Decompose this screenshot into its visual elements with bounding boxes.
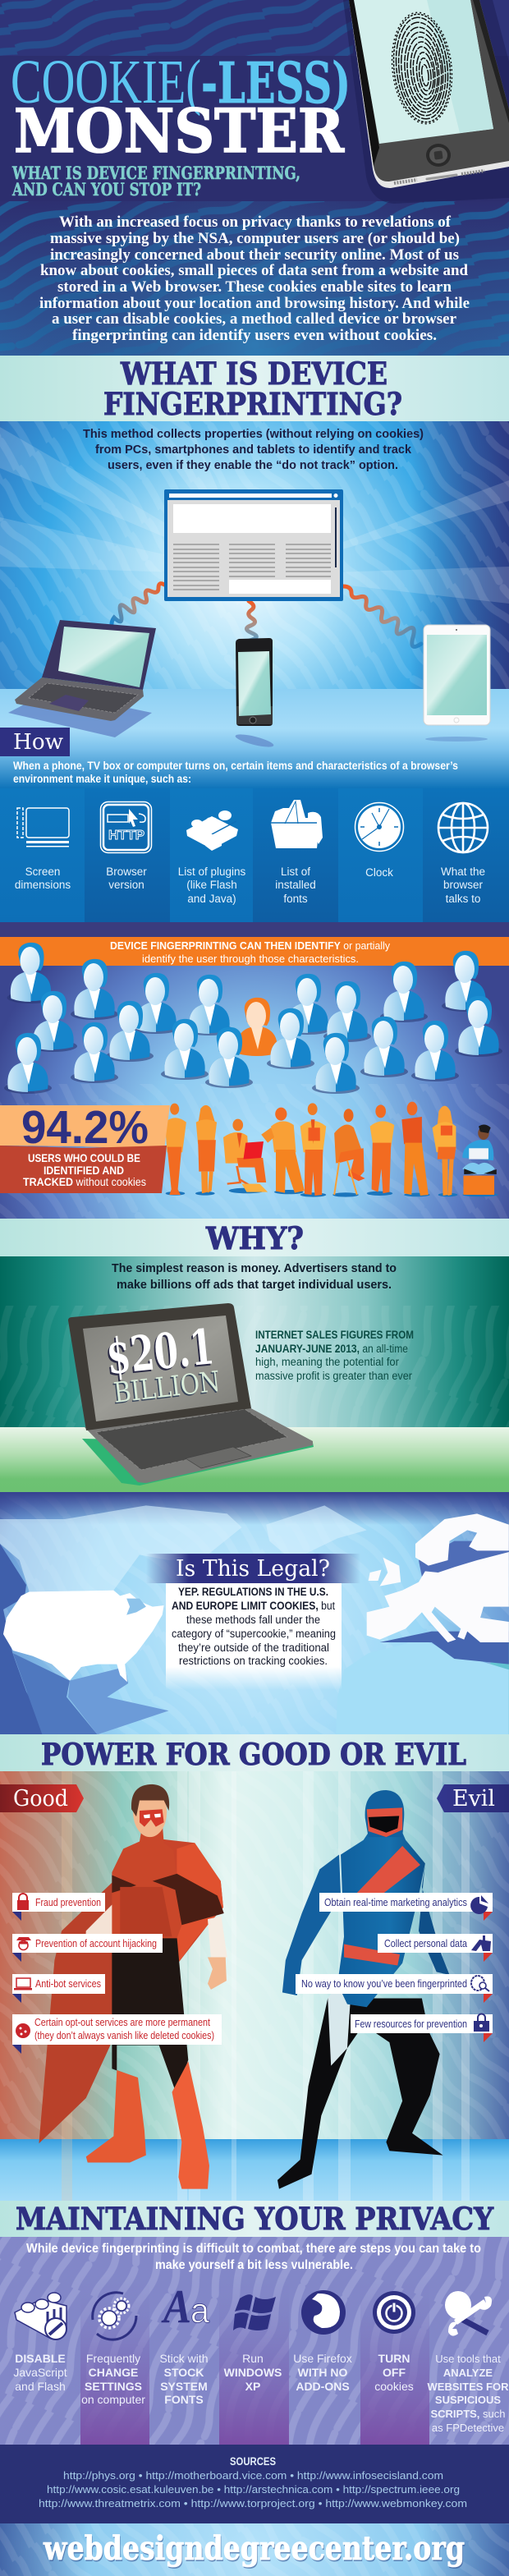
- text block: identify statement: [110, 939, 390, 965]
- callout: 94.2% statistic: TRACKED without cookies: [23, 1176, 146, 1188]
- subtitle: AND CAN YOU STOP IT?: [11, 179, 201, 200]
- text: privacy step labels: on computer: [81, 2393, 145, 2406]
- text: how item labels: List of: [281, 866, 310, 878]
- panel: sources: SOURCES: [230, 2455, 276, 2468]
- text block: method description: This method collects properties (without relying on cookies): [83, 428, 424, 441]
- callout: collect personal data: [378, 1934, 493, 1962]
- callout: prevention of account hijacking: Prevention of account hijacking: [35, 1937, 157, 1949]
- callout: opt-out services: [12, 2014, 222, 2054]
- chart: crowd of user busts with one identified in orange: [4, 943, 502, 1094]
- icon: screen dimensions: [17, 808, 69, 847]
- icon: browser version: [100, 801, 151, 852]
- text: privacy step labels: WITH NO: [298, 2366, 347, 2379]
- text block: internet sales figures: [255, 1329, 414, 1382]
- text: legal explanation: these methods fall under the: [186, 1614, 320, 1626]
- icon: globe: [438, 803, 488, 852]
- callout: no way to know: No way to know you’ve been fingerprinted: [301, 1977, 467, 1990]
- panel: what is device fingerprinting heading band: FINGERPRINTING?: [103, 386, 402, 422]
- icon: windows logo: [233, 2294, 276, 2330]
- text: legal explanation: they’re outside of the traditional: [178, 1642, 329, 1654]
- icon: laptop showing sales figure: $20.1: [104, 1318, 217, 1385]
- text: privacy step labels: OFF: [383, 2366, 406, 2379]
- callout: prevention of account hijacking: [12, 1934, 163, 1962]
- text: legal explanation: [172, 1586, 336, 1667]
- text: privacy step labels: Use tools that: [435, 2353, 501, 2365]
- text block: identify statement: DEVICE FINGERPRINTING CAN THEN IDENTIFY or partially: [110, 939, 390, 952]
- text: privacy step labels: cookies: [374, 2380, 414, 2393]
- text block: introduction: stored in a Web browser. These cookies enable sites to learn: [57, 278, 452, 296]
- icon: clock: [355, 803, 404, 851]
- text: privacy step labels: STOCK: [164, 2366, 204, 2379]
- tag: good: [0, 1784, 84, 1812]
- person 10 blue seated with laptop: [462, 1125, 497, 1195]
- chart: world map with U.S. and Europe highlighted: [0, 1505, 509, 1734]
- text: legal explanation: YEP. REGULATIONS IN THE U.S.: [178, 1586, 328, 1598]
- icon: smartphone: [235, 638, 274, 750]
- text: privacy step labels: ANALYZE: [443, 2367, 493, 2379]
- panel: what is device fingerprinting heading band: WHAT IS DEVICE: [120, 356, 387, 392]
- tag: evil: [437, 1784, 509, 1812]
- text: how item labels: Clock: [365, 866, 393, 879]
- Britain: [380, 1558, 401, 1586]
- text: privacy step labels: Run: [242, 2352, 264, 2365]
- icon: laptop: [8, 620, 156, 737]
- panel: why heading band: [0, 1219, 509, 1256]
- text block: identify statement: identify the user through those characteristics.: [142, 953, 359, 965]
- text: privacy step labels: XP: [245, 2380, 260, 2393]
- icon: rotating gears: [93, 2293, 136, 2340]
- person 6 on stool: [334, 1109, 365, 1195]
- text: privacy step labels: SETTINGS: [85, 2380, 142, 2393]
- callout: collect personal data: Collect personal data: [384, 1937, 468, 1949]
- person 4: [261, 1108, 305, 1193]
- title: [11, 48, 351, 167]
- text: legal explanation: AND EUROPE LIMIT COOKIES, but: [172, 1600, 335, 1612]
- arrow: centre coiled wire: [246, 601, 256, 641]
- text block: method description: [83, 428, 424, 472]
- text block: why explanation: The simplest reason is money. Advertisers stand to: [112, 1261, 397, 1275]
- chart: group of orange people with silhouettes: [165, 1102, 498, 1197]
- text: how item labels: List of plugins: [178, 866, 246, 878]
- text block: how description: [13, 760, 458, 785]
- text: how item labels: dimensions: [15, 879, 71, 891]
- callout: no way to know: [296, 1974, 493, 2003]
- callout: anti-bot services: [12, 1974, 105, 2003]
- icon: phone showing a fingerprint: [343, 0, 509, 204]
- person 3 seated with red laptop: [223, 1119, 268, 1192]
- text: how item labels: fonts: [283, 893, 308, 905]
- callout: fraud prevention: [12, 1893, 105, 1921]
- panel: sources: http://www.cosic.esat.kuleuven.be • http://arstechnica.com • http://spectrum.ieee.org: [47, 2483, 460, 2496]
- Europe mainland: [367, 1552, 509, 1642]
- text: privacy step labels: as FPDetective: [432, 2422, 504, 2434]
- text: privacy step labels: TURN: [378, 2352, 410, 2365]
- icon: good superhero figure: [39, 1784, 227, 2189]
- arrow: right coiled wire: [343, 586, 421, 647]
- icon: browser version: HTTP: [108, 829, 144, 843]
- icon: power button: [373, 2291, 415, 2334]
- text: legal explanation: restrictions on tracking cookies.: [179, 1655, 328, 1667]
- title: COOKIE(: [11, 48, 201, 117]
- panel: why section background: [0, 1256, 509, 1492]
- text: how item labels: Browser: [106, 866, 147, 878]
- text: privacy step labels: JavaScript: [13, 2366, 67, 2379]
- icon: tablet: [424, 625, 490, 742]
- text block: internet sales figures: massive profit is greater than ever: [255, 1370, 412, 1382]
- text: privacy step labels: FONTS: [164, 2393, 204, 2406]
- icon: fonts folder: [271, 800, 323, 848]
- text: how item labels: browser: [443, 879, 484, 891]
- subtitle: [11, 163, 300, 200]
- text: privacy step labels: SYSTEM: [160, 2380, 208, 2393]
- callout: opt-out services: Certain opt-out services are more permanent: [34, 2016, 210, 2028]
- callout: opt-out services: (they don’t always vanish like deleted cookies): [34, 2029, 214, 2041]
- person 1: [165, 1104, 186, 1195]
- text: privacy step labels: and Flash: [15, 2380, 66, 2393]
- icon: fingerprint: [387, 10, 457, 126]
- panel: what is device fingerprinting heading band: [0, 356, 509, 422]
- callout: anti-bot services: Anti-bot services: [35, 1977, 101, 1990]
- icon: stock fonts: A: [161, 2280, 191, 2333]
- callout: 94.2% statistic: [0, 1101, 170, 1193]
- icon: evil masked figure: [277, 1790, 449, 2189]
- text block: how description: When a phone, TV box or computer turns on, certain items and characteristics of a browser’s: [13, 760, 458, 772]
- icon: browser window: [164, 489, 343, 601]
- Scandinavia: [415, 1513, 509, 1566]
- person 9 woman with tablet: [433, 1106, 456, 1196]
- title: MONSTER: [14, 96, 345, 167]
- panel: identification crowd background: [0, 922, 509, 1219]
- panel: sources: http://phys.org • http://motherboard.vice.com • http://www.infosecisland.com: [63, 2469, 443, 2482]
- text block: privacy introduction: make yourself a bit less vulnerable.: [155, 2258, 353, 2272]
- text: privacy step labels: SUSPICIOUS: [435, 2394, 501, 2406]
- icon: stock fonts: [161, 2280, 210, 2333]
- text block: introduction: information about your location and browsing history. And while: [39, 295, 470, 312]
- text block: introduction: know about cookies, small pieces of data sent from a website and: [40, 262, 468, 279]
- text: how item labels: installed: [275, 879, 316, 891]
- panel: hero background: [0, 0, 509, 356]
- icon: laptop showing sales figure: [68, 1303, 314, 1485]
- text: how item labels: [15, 866, 485, 905]
- text block: introduction: With an increased focus on privacy thanks to revelations of: [59, 214, 452, 231]
- text block: introduction: [39, 214, 470, 344]
- person 7: [370, 1104, 394, 1193]
- callout: 94.2% statistic: IDENTIFIED AND: [44, 1164, 124, 1177]
- text block: internet sales figures: JANUARY-JUNE 2013, an all-time: [255, 1343, 408, 1355]
- panel: world map background: [0, 1492, 509, 1734]
- Ireland: [369, 1570, 381, 1581]
- text block: internet sales figures: INTERNET SALES FIGURES FROM: [255, 1329, 414, 1341]
- text: privacy step labels: CHANGE: [89, 2366, 138, 2379]
- text: how item labels: Screen: [25, 866, 60, 878]
- panel: power for good or evil heading band: POWER FOR GOOD OR EVIL: [41, 1738, 466, 1772]
- icon: laptop showing sales figure: $20.1: [103, 1320, 215, 1387]
- icon: laptop showing sales figure: BILLION: [112, 1365, 222, 1410]
- panel: sources: http://www.threatmetrix.com • http://www.torproject.org • http://www.webmonkey.com: [39, 2497, 467, 2509]
- panel: is this legal: Is This Legal?: [176, 1556, 330, 1582]
- panel: device diagram background: [0, 421, 509, 788]
- text block: introduction: massive spying by the NSA, computer users are (or should be): [50, 230, 460, 247]
- panel: footer website: [0, 2523, 509, 2576]
- callout: fraud prevention: Fraud prevention: [35, 1896, 101, 1908]
- text: privacy step labels: WINDOWS: [224, 2366, 282, 2379]
- text: privacy step labels: [13, 2352, 509, 2434]
- text: how item labels: What the: [441, 866, 485, 878]
- icon: identified user: [236, 998, 277, 1056]
- tag: evil: Evil: [452, 1786, 495, 1811]
- panel: sources: [0, 2445, 509, 2523]
- text block: method description: from PCs, smartphones and tablets to identify and track: [95, 443, 412, 457]
- text block: introduction: fingerprinting can identify users even without cookies.: [72, 327, 437, 344]
- icon: analyze tools: [445, 2291, 492, 2336]
- text: privacy step labels: SCRIPTS, such: [430, 2408, 506, 2420]
- callout: real-time marketing analytics: Obtain real-time marketing analytics: [324, 1896, 467, 1908]
- text: how item labels: version: [108, 879, 144, 891]
- tag: good: Good: [13, 1786, 68, 1811]
- icon: stock fonts: a: [190, 2291, 210, 2330]
- text block: introduction: increasingly concerned about their security online. Most of us: [50, 246, 459, 264]
- text: how item labels: talks to: [446, 893, 480, 905]
- arrow: left coiled wire: [112, 584, 164, 624]
- person 5 with tablet: [300, 1103, 326, 1196]
- text: how item labels: and Java): [187, 893, 236, 905]
- text: privacy step labels: Stick with: [159, 2352, 209, 2365]
- person 8 on phone: [401, 1102, 429, 1196]
- icon: disabled plugin brick: [15, 2293, 66, 2340]
- callout: few resources: [351, 2014, 493, 2042]
- text: privacy step labels: DISABLE: [15, 2352, 66, 2365]
- text block: why explanation: make billions off ads that target individual users.: [117, 1278, 392, 1292]
- heading: how: [0, 728, 70, 756]
- panel: is this legal: [146, 1554, 360, 1690]
- text: privacy step labels: WEBSITES FOR: [428, 2381, 509, 2393]
- text block: how description: environment make it unique, such as:: [13, 773, 191, 785]
- panel: good versus evil background: [0, 1771, 509, 2201]
- panel: privacy steps background: [0, 2237, 509, 2445]
- title: -LESS): [201, 51, 351, 117]
- text block: internet sales figures: high, meaning the potential for: [255, 1356, 399, 1368]
- text: privacy step labels: Frequently: [86, 2352, 140, 2365]
- panel: how section background: [0, 788, 509, 922]
- icon: plugin lego brick: [186, 810, 238, 851]
- callout: 94.2% statistic: USERS WHO COULD BE: [28, 1152, 140, 1164]
- text block: privacy introduction: [26, 2242, 481, 2272]
- callout: few resources: Few resources for prevention: [355, 2018, 467, 2030]
- text: how item labels: (like Flash: [186, 879, 237, 891]
- text: privacy step labels: ADD-ONS: [296, 2380, 350, 2393]
- icon: firefox globe: [301, 2290, 346, 2335]
- subtitle: WHAT IS DEVICE FINGERPRINTING,: [11, 163, 300, 183]
- icon: laptop showing sales figure: BILLION: [111, 1366, 221, 1412]
- person 2: [196, 1105, 217, 1193]
- heading: how: How: [13, 730, 63, 755]
- text block: method description: users, even if they enable the “do not track” option.: [108, 459, 398, 472]
- callout: 94.2% statistic: 94.2%: [21, 1101, 149, 1154]
- callout: real-time marketing analytics: [319, 1893, 493, 1921]
- text: privacy step labels: Use Firefox: [293, 2352, 352, 2365]
- text block: why explanation: [112, 1261, 397, 1292]
- panel: why heading band: WHY?: [205, 1220, 304, 1256]
- text: legal explanation: category of “supercookie,” meaning: [172, 1628, 336, 1640]
- United States: [3, 1591, 164, 1682]
- text block: introduction: a user can disable cookies, a method called device or browser: [52, 310, 457, 328]
